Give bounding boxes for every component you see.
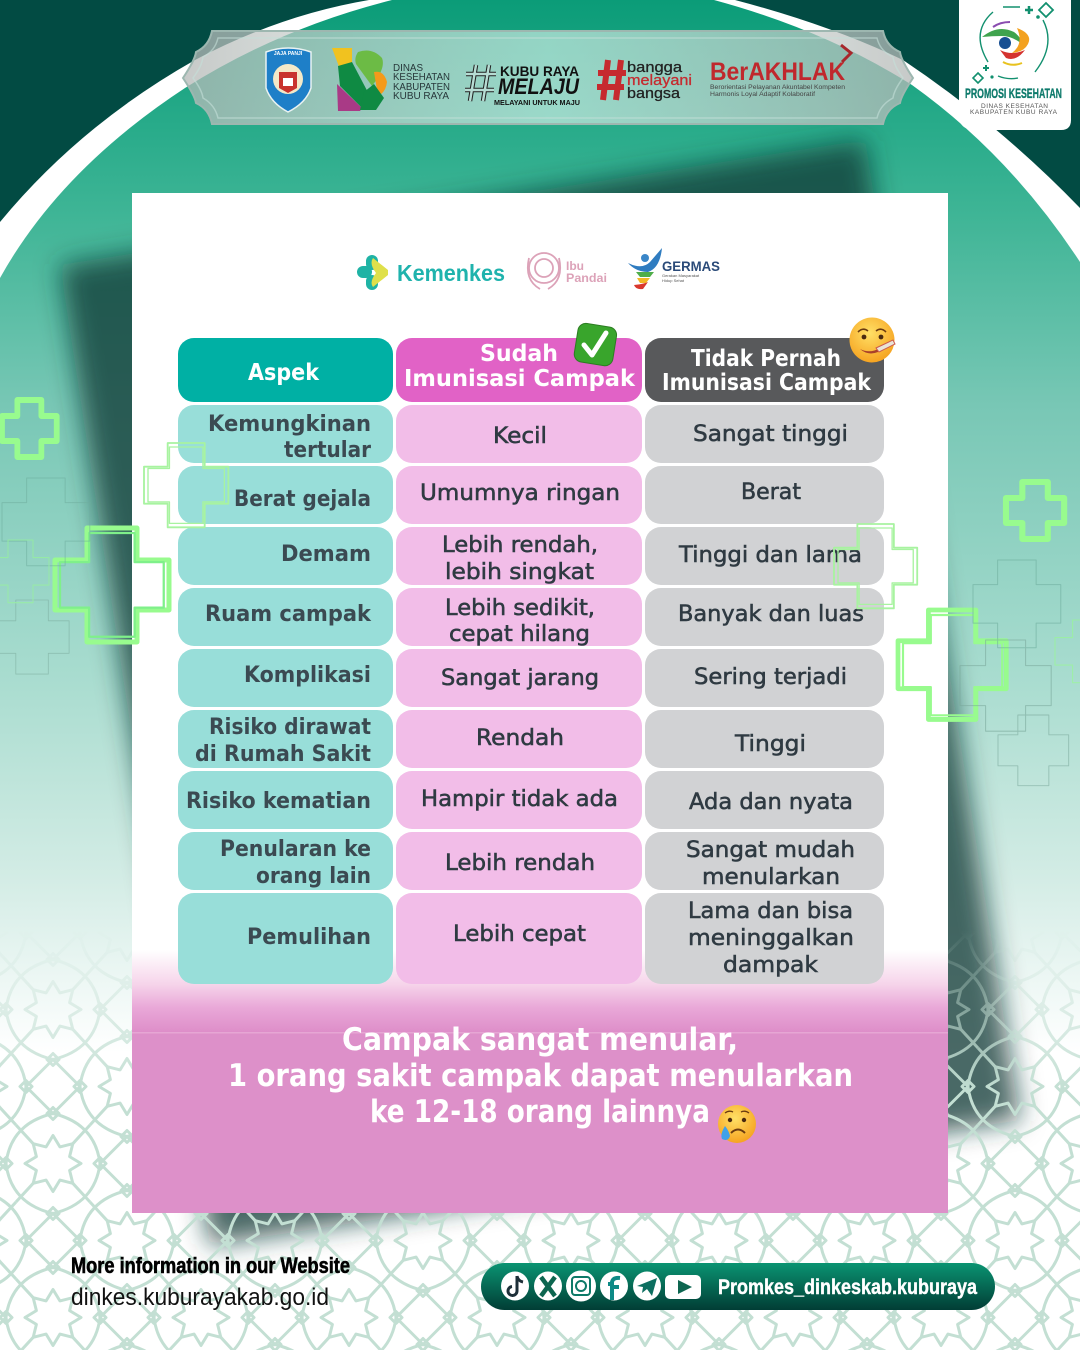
column: Tidak Pernah Imunisasi: dampak	[723, 953, 818, 978]
column: Aspek: Berat gejala	[234, 487, 371, 512]
icon: crying face emoji	[718, 1105, 756, 1143]
column: Aspek: Penularan ke	[220, 837, 371, 862]
column: Aspek: Demam	[281, 542, 371, 567]
logo: #Kubu Raya Melaju: KUBU RAYA	[500, 63, 579, 79]
logos: Kemenkes, Ibu Pandai, GERMAS: GERMAS	[662, 258, 720, 274]
column: Sudah Imunisasi: cepat hilang	[449, 622, 590, 647]
column: Sudah Imunisasi: Lebih sedikit,	[445, 596, 595, 621]
Promosi Kesehatan logo card	[959, 0, 1071, 130]
callout: contagion message: Campak sangat menular,	[342, 1022, 738, 1058]
table header row: Aspek	[248, 360, 320, 386]
column: Aspek: Risiko dirawat	[209, 715, 371, 740]
icon: faint pluses left	[0, 478, 90, 674]
icon: Facebook	[600, 1272, 628, 1300]
logo: #Kubu Raya Melaju: MELAYANI UNTUK MAJU	[494, 100, 580, 107]
column: Sudah Imunisasi: Lebih rendah,	[442, 533, 598, 558]
logo: #Kubu Raya Melaju	[465, 63, 580, 107]
column: Aspek: Pemulihan	[247, 925, 371, 950]
logos: Kemenkes, Ibu Pandai, GERMAS: Ibu	[566, 259, 584, 273]
column: Sudah Imunisasi: Kecil	[493, 424, 547, 449]
icon: sick face emoji	[850, 318, 895, 362]
logos: Kemenkes, Ibu Pandai, GERMAS: Gerakan Masyarakat	[662, 273, 700, 278]
column: Sudah Imunisasi: lebih singkat	[445, 560, 594, 585]
icon: Telegram	[633, 1272, 661, 1300]
footer website text: More information in our Website	[71, 1253, 350, 1278]
callout: contagion message: ke 12-18 orang lainnya	[370, 1094, 710, 1130]
icon: Kemenkes	[357, 255, 388, 290]
header plaque with partner logos	[183, 31, 913, 124]
footer website text	[71, 1253, 350, 1311]
callout: contagion message: 1 orang sakit campak dapat menularkan	[228, 1058, 853, 1094]
column: Sudah Imunisasi: Lebih cepat	[453, 922, 586, 947]
column: Tidak Pernah Imunisasi: Lama dan bisa	[688, 899, 853, 924]
icon: TikTok	[501, 1272, 529, 1300]
icon: YouTube	[665, 1275, 701, 1299]
column: Tidak Pernah Imunisasi: meninggalkan	[688, 926, 854, 951]
callout: contagion message	[228, 1022, 853, 1130]
Promosi Kesehatan logo card: KABUPATEN KUBU RAYA	[970, 109, 1058, 116]
logo: Kubu Raya regional shield	[266, 48, 311, 112]
column: Sudah Imunisasi	[396, 405, 642, 984]
logo: Dinas Kesehatan Kubu Raya: KABUPATEN	[393, 82, 450, 93]
icon: green check mark	[573, 322, 618, 367]
icon: swirl emblem	[973, 3, 1053, 83]
social media pill	[481, 1263, 995, 1310]
panel: comparison card	[132, 193, 948, 1213]
column: Tidak Pernah Imunisasi: Banyak dan luas	[678, 602, 864, 627]
logo: #bangga melayani bangsa	[597, 59, 692, 102]
logo: Kubu Raya regional shield: JAJA PANJI	[274, 51, 303, 57]
icon: thin plus right	[834, 524, 917, 608]
icon: Instagram	[566, 1270, 596, 1302]
icon: plus medium right	[898, 610, 1006, 719]
column: Aspek: Komplikasi	[244, 663, 371, 688]
logo: #bangga melayani bangsa: bangsa	[627, 85, 681, 102]
logo: Dinas Kesehatan Kubu Raya: DINAS	[393, 63, 423, 74]
table header row: Tidak Pernah	[691, 346, 841, 372]
logo: Dinas Kesehatan Kubu Raya: KUBU RAYA	[393, 91, 449, 102]
decorative neon plus icons	[0, 400, 1080, 786]
logo: Dinas Kesehatan Kubu Raya: KESEHATAN	[393, 72, 450, 83]
logo: BerAKHLAK: Berorientasi Pelayanan Akuntabel Kompeten	[710, 85, 845, 91]
icon: plus top right	[1006, 482, 1064, 539]
Promosi Kesehatan logo card: DINAS KESEHATAN	[981, 103, 1048, 110]
table header row	[178, 338, 884, 402]
column: Sudah Imunisasi: Rendah	[476, 726, 564, 751]
icon: plus top left	[2, 400, 57, 457]
column: Sudah Imunisasi: Hampir tidak ada	[421, 787, 618, 812]
icon: GERMAS	[628, 248, 662, 289]
column: Aspek: Risiko kematian	[186, 789, 371, 814]
logo: #Kubu Raya Melaju: MELAJU	[498, 74, 580, 99]
column: Tidak Pernah Imunisasi	[645, 405, 884, 984]
column: Aspek: orang lain	[256, 864, 371, 889]
column: Tidak Pernah Imunisasi: menularkan	[702, 865, 840, 890]
column: Tidak Pernah Imunisasi: Berat	[741, 480, 801, 505]
column: Tidak Pernah Imunisasi: Sangat tinggi	[693, 422, 848, 447]
logo: BerAKHLAK: BerAKHLAK	[710, 58, 845, 86]
logo: Dinas Kesehatan Kubu Raya	[332, 48, 450, 111]
icon: Ibu Pandai	[528, 253, 560, 289]
column: Sudah Imunisasi: Sangat jarang	[441, 666, 599, 691]
column: Aspek: di Rumah Sakit	[195, 742, 371, 767]
table header row: Imunisasi Campak	[404, 366, 636, 392]
table header row: Sudah	[480, 341, 558, 367]
column: Tidak Pernah Imunisasi: Ada dan nyata	[689, 790, 853, 815]
column: Sudah Imunisasi: Umumnya ringan	[420, 481, 620, 506]
column: Tidak Pernah Imunisasi: Sering terjadi	[694, 665, 847, 690]
logos: Kemenkes, Ibu Pandai, GERMAS: Pandai	[566, 271, 607, 285]
footer website text: dinkes.kuburayakab.go.id	[71, 1284, 329, 1311]
column: Tidak Pernah Imunisasi: Sangat mudah	[686, 838, 855, 863]
card drop shadow	[60, 140, 1020, 1245]
logo: #bangga melayani bangsa: bangga	[627, 59, 683, 76]
logos: Kemenkes, Ibu Pandai, GERMAS	[357, 248, 720, 290]
column: Tidak Pernah Imunisasi: Tinggi	[734, 732, 806, 757]
column: Aspek: Ruam campak	[205, 602, 372, 627]
social media pill: Promkes_dinkeskab.kuburaya	[718, 1276, 977, 1299]
logos: Kemenkes, Ibu Pandai, GERMAS: Hidup Sehat	[662, 278, 685, 283]
icon: faint pluses right	[960, 560, 1080, 786]
logo: #bangga melayani bangsa: melayani	[627, 72, 692, 89]
column: Aspek	[178, 405, 393, 984]
column: Tidak Pernah Imunisasi: Tinggi dan lama	[678, 543, 862, 568]
column: Aspek: tertular	[284, 438, 371, 463]
geometric lattice pattern	[0, 930, 1080, 1350]
icon: plus medium left	[55, 528, 169, 642]
icon: thin plus left	[144, 443, 228, 527]
column: Aspek: Kemungkinan	[208, 412, 371, 437]
icon: X	[534, 1272, 562, 1300]
table header row: Imunisasi Campak	[662, 370, 872, 396]
column: Sudah Imunisasi: Lebih rendah	[445, 851, 595, 876]
logo: BerAKHLAK: Harmonis Loyal Adaptif Kolaboratif	[710, 92, 815, 98]
logos: Kemenkes, Ibu Pandai, GERMAS: Kemenkes	[397, 260, 505, 286]
logo: BerAKHLAK	[710, 45, 851, 98]
